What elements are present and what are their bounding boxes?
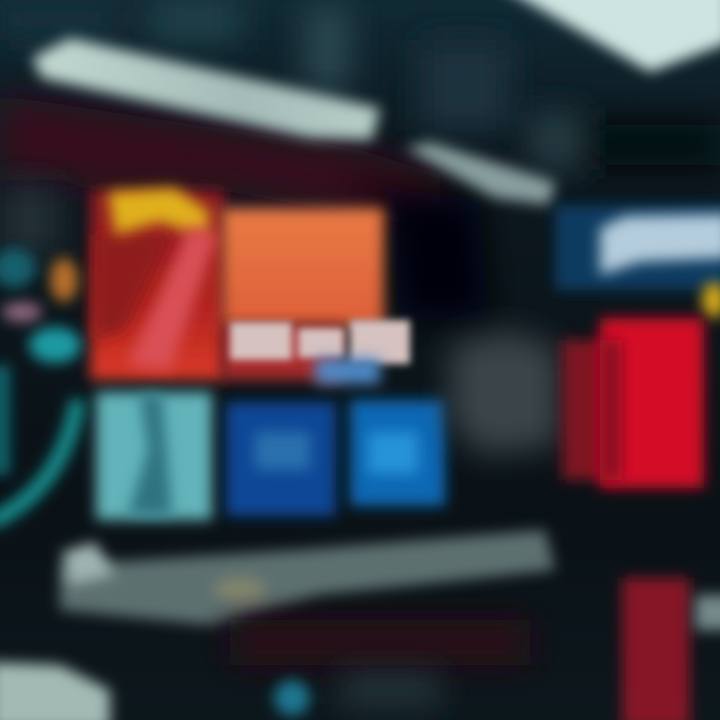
right red bright — [600, 318, 704, 488]
middle light bar — [405, 142, 555, 205]
pink diagonal stroke — [128, 225, 218, 370]
left teal vertical — [0, 365, 10, 475]
right red shade — [600, 340, 622, 480]
blue spot — [315, 358, 380, 384]
shelf highlight — [62, 542, 115, 585]
dark red poster shade — [95, 235, 170, 340]
sign white glare — [600, 214, 720, 275]
dark red wall band — [0, 95, 440, 230]
yellow spot right — [702, 282, 720, 318]
shelf warm spot — [214, 578, 266, 602]
bottom left light — [0, 662, 110, 720]
left teal top — [0, 248, 36, 288]
bottom right grey — [695, 595, 720, 630]
white text streak — [230, 320, 410, 364]
panel: red poster — [90, 188, 224, 380]
left teal blob — [29, 327, 81, 363]
panel: right blue sign — [555, 205, 720, 290]
panel: light blue poster — [350, 400, 445, 506]
dark blue poster highlight — [255, 432, 310, 470]
left column — [0, 185, 60, 255]
ceiling structure — [0, 0, 720, 170]
top right light bar — [490, 0, 720, 72]
left pink spot — [2, 302, 42, 322]
panel: orange poster — [222, 208, 410, 384]
panel: teal poster — [96, 392, 212, 520]
dark recess — [330, 180, 490, 320]
left teal figure — [0, 248, 81, 522]
light blue poster highlight — [368, 432, 418, 474]
bottom teal spot — [274, 680, 310, 716]
lower shelf — [60, 530, 555, 625]
bottom right red — [622, 578, 690, 720]
top left light bar — [32, 38, 380, 140]
lower dark red band — [230, 620, 530, 665]
grey central column — [450, 330, 560, 455]
panel: right red — [562, 318, 704, 488]
panel: dark blue poster — [226, 402, 336, 516]
yellow numeral top — [108, 188, 210, 238]
red lower strip — [222, 325, 342, 380]
teal poster shadow — [128, 395, 172, 515]
bottom grey spot — [340, 675, 440, 705]
left orange spot — [50, 258, 78, 302]
